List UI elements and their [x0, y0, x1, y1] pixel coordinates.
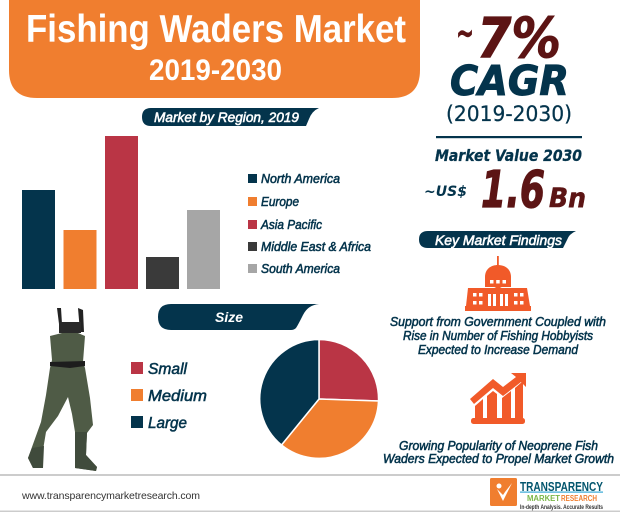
bar chart: market by region: [22, 136, 220, 289]
legend: size: Small: [148, 361, 187, 378]
finding 1 text: [390, 314, 606, 357]
legend: regions: North America: [261, 171, 340, 186]
finding 1 text: Rise in Number of Fishing Hobbyists: [403, 328, 593, 343]
legend: regions: South America: [261, 261, 340, 276]
legend: size: Large: [148, 415, 187, 432]
CAGR callout: (2019-2030): [446, 102, 572, 126]
finding 1 text: Support from Government Coupled with: [390, 314, 606, 329]
legend: regions: Middle East & Africa: [261, 239, 371, 254]
icon: government building: [465, 256, 531, 311]
icon: growth chart: [470, 373, 526, 424]
illustration: fishing waders: [28, 308, 97, 471]
legend: size: Medium: [148, 388, 207, 405]
heading: size: [158, 304, 319, 330]
CAGR callout: ~: [456, 13, 474, 54]
heading: size: Size: [215, 309, 243, 325]
market value callout: Bn: [549, 183, 586, 214]
heading: key market findings: [419, 231, 576, 248]
legend: regions: Asia Pacific: [260, 217, 322, 232]
title banner: [9, 0, 420, 98]
legend: regions: [248, 171, 371, 276]
subtitle years: 2019-2030: [149, 54, 282, 87]
legend: regions: Europe: [261, 194, 299, 209]
logo: transparency market research: RESEARCH: [561, 494, 597, 503]
market value callout: [424, 146, 586, 220]
CAGR callout: [446, 6, 572, 126]
market value callout: 1.6: [481, 161, 545, 220]
heading: key market findings: Key Market Findings: [435, 233, 562, 248]
finding 2 text: [383, 438, 614, 466]
logo: transparency market research: MARKET: [527, 494, 560, 503]
title: Fishing Waders Market: [26, 8, 406, 51]
CAGR callout: 7%: [477, 6, 561, 70]
legend: size: [131, 361, 207, 432]
finding 1 text: Expected to Increase Demand: [418, 342, 579, 357]
heading: market by region: Market by Region, 2019: [154, 109, 299, 125]
website url: www.transparencymarketresearch.com: [21, 490, 200, 502]
finding 2 text: Growing Popularity of Neoprene Fish: [399, 438, 598, 453]
pie chart: size: [260, 339, 379, 458]
logo: transparency market research: [490, 478, 604, 511]
market value callout: Market Value 2030: [435, 146, 582, 165]
CAGR callout: CAGR: [450, 57, 569, 105]
market value callout: ~US$: [424, 184, 467, 200]
